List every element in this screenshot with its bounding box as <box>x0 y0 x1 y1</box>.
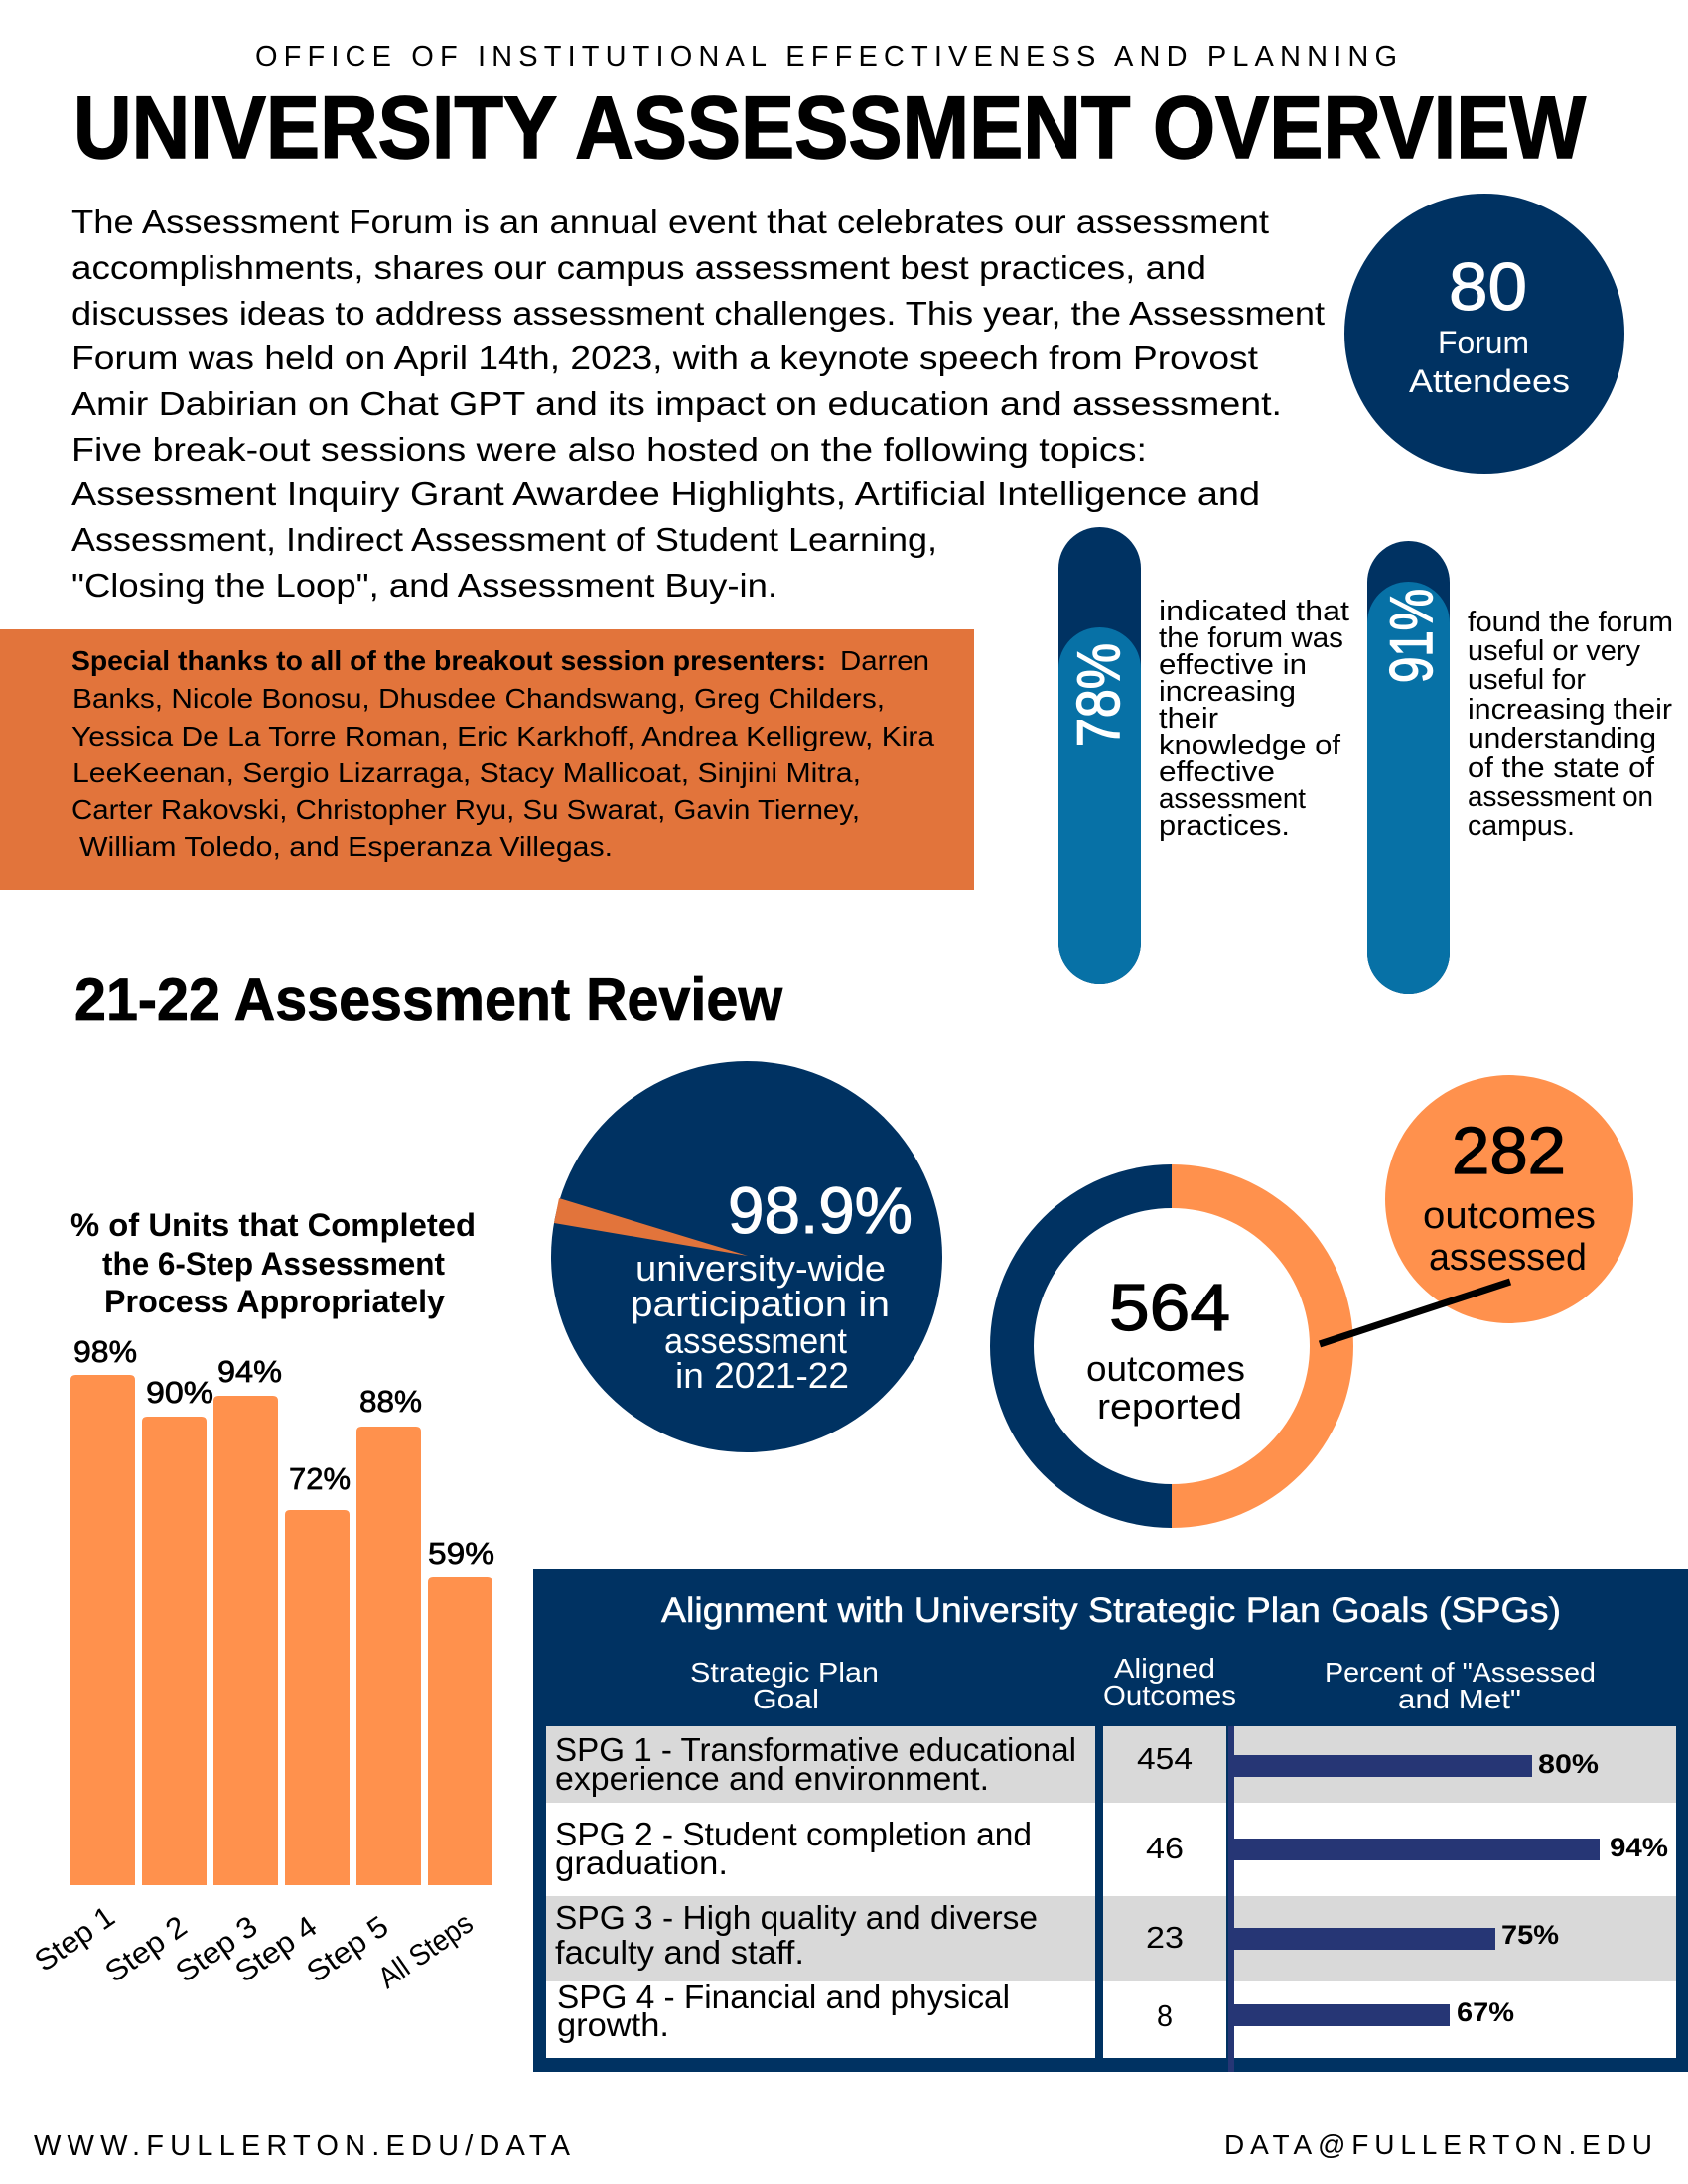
office subtitle: OFFICE OF INSTITUTIONAL EFFECTIVENESS AND PLANNING <box>255 41 1397 72</box>
thanks panel: Carter Rakovski, Christopher Ryu, Su Swarat, Gavin Tierney, <box>71 794 860 825</box>
footer email: DATA@FULLERTON.EDU <box>1224 2129 1652 2160</box>
pill 78 caption: practices. <box>1159 810 1290 842</box>
pill 91 caption: understanding <box>1468 723 1656 754</box>
thanks panel: William Toledo, and Esperanza Villegas. <box>79 831 613 862</box>
table cell backgrounds <box>546 1726 1676 2058</box>
pie: university-wide participation: assessment <box>664 1320 847 1361</box>
thanks panel: Yessica De La Torre Roman, Eric Karkhoff, Andrea Kelligrew, Kira <box>71 721 934 751</box>
column headers: Percent of "Assessed <box>1325 1657 1596 1688</box>
bar values: 72% <box>289 1461 351 1496</box>
pie: university-wide participation: 98.9% <box>728 1173 913 1247</box>
circle: outcomes assessed: assessed <box>1429 1237 1587 1279</box>
pill 78 caption: the forum was <box>1159 622 1343 654</box>
intro paragraph: accomplishments, shares our campus assessment best practices, and <box>71 249 1206 286</box>
pill 91 caption: useful for <box>1468 664 1586 696</box>
pie: university-wide participation: participation in <box>631 1284 890 1324</box>
bar values: 88% <box>359 1384 422 1419</box>
pie: university-wide participation: in 2021-22 <box>675 1355 849 1396</box>
donut: outcomes reported: 564 <box>1109 1271 1230 1345</box>
aligned outcome counts: 454 <box>1137 1741 1193 1776</box>
intro paragraph: Five break-out sessions were also hosted on the following topics: <box>71 431 1147 468</box>
aligned outcome counts: 46 <box>1146 1831 1184 1865</box>
pill 91 caption: useful or very <box>1468 635 1640 667</box>
goal labels <box>555 1731 1076 2043</box>
step labels <box>29 1900 479 1995</box>
bar values: 98% <box>73 1334 137 1369</box>
bar values: 94% <box>217 1354 282 1389</box>
chart title <box>70 1207 476 1319</box>
pill 78 caption: effective in <box>1159 649 1307 681</box>
percent labels: 75% <box>1501 1920 1559 1950</box>
goal labels: graduation. <box>555 1844 728 1881</box>
step labels: Step 5 <box>301 1910 394 1989</box>
step labels: Step 3 <box>170 1910 263 1989</box>
pill: 91 percent: 91% <box>1378 589 1445 683</box>
circle: outcomes assessed: 282 <box>1452 1114 1566 1188</box>
column headers: Outcomes <box>1103 1680 1236 1710</box>
thanks panel <box>0 629 974 890</box>
pill 78 caption: knowledge of <box>1159 730 1341 761</box>
pill 91 caption: assessment on <box>1468 781 1653 813</box>
percent labels <box>1457 1749 1668 2027</box>
column headers: Goal <box>753 1684 819 1714</box>
connector line <box>1320 1282 1510 1344</box>
pill 78 caption: their <box>1159 703 1218 735</box>
horizontal bars <box>1228 1726 1600 2072</box>
section heading: 21-22 Assessment Review <box>74 966 782 1032</box>
forum attendees circle: Forum <box>1438 325 1529 360</box>
intro paragraph: "Closing the Loop", and Assessment Buy-in. <box>71 567 777 604</box>
pill 91 caption: increasing their <box>1468 694 1672 726</box>
percent labels: 67% <box>1457 1997 1514 2027</box>
goal labels: SPG 3 - High quality and diverse <box>555 1899 1038 1936</box>
forum attendees circle: 80 <box>1449 249 1527 325</box>
thanks panel: Special thanks to all of the breakout session presenters: <box>71 645 826 676</box>
column headers: Aligned <box>1114 1653 1215 1684</box>
donut: outcomes reported: outcomes <box>1086 1348 1245 1389</box>
pie: university-wide participation <box>551 1061 942 1452</box>
goal labels: faculty and staff. <box>555 1934 804 1971</box>
step labels: Step 1 <box>29 1900 121 1979</box>
goal labels: SPG 1 - Transformative educational <box>555 1731 1076 1768</box>
column headers: and Met" <box>1398 1684 1521 1714</box>
bar values: 90% <box>146 1375 213 1410</box>
bar values <box>73 1334 494 1570</box>
pie: university-wide participation: university-wide <box>635 1248 886 1289</box>
table title: Alignment with University Strategic Plan Goals (SPGs) <box>661 1591 1561 1630</box>
donut: outcomes reported: reported <box>1097 1386 1242 1427</box>
thanks panel: LeeKeenan, Sergio Lizarraga, Stacy Mallicoat, Sinjini Mitra, <box>72 757 861 788</box>
intro paragraph: Amir Dabirian on Chat GPT and its impact on education and assessment. <box>71 385 1282 422</box>
pill 78 caption <box>1159 596 1349 842</box>
pill 78 caption: effective <box>1159 756 1275 788</box>
forum attendees circle <box>1344 194 1624 474</box>
goal labels: experience and environment. <box>555 1760 989 1797</box>
bar values: 59% <box>428 1536 494 1570</box>
intro paragraph: Assessment, Indirect Assessment of Student Learning, <box>71 521 937 558</box>
pill 91 caption: campus. <box>1468 810 1575 842</box>
goal labels: SPG 2 - Student completion and <box>555 1816 1032 1852</box>
step labels: Step 4 <box>229 1910 323 1989</box>
step labels: All Steps <box>372 1907 479 1995</box>
aligned outcome counts <box>1137 1741 1193 2033</box>
intro paragraph <box>71 204 1325 604</box>
aligned outcome counts: 8 <box>1157 1998 1173 2033</box>
chart title: the 6-Step Assessment <box>102 1246 445 1282</box>
bars <box>70 1375 492 1885</box>
donut: outcomes reported <box>990 1164 1353 1528</box>
pill 91 caption: found the forum <box>1468 607 1673 638</box>
percent labels: 80% <box>1538 1749 1599 1779</box>
thanks panel: Darren <box>840 645 929 676</box>
goal labels: SPG 4 - Financial and physical <box>557 1979 1010 2015</box>
goal labels: growth. <box>557 2006 669 2043</box>
intro paragraph: discusses ideas to address assessment challenges. This year, the Assessment <box>71 295 1325 332</box>
footer website: WWW.FULLERTON.EDU/DATA <box>34 2130 571 2162</box>
panel: strategic plan alignment table <box>533 1569 1688 2072</box>
circle: outcomes assessed: outcomes <box>1423 1195 1596 1237</box>
bar chart: 6-step completion <box>29 1207 494 1995</box>
percent labels: 94% <box>1610 1833 1668 1862</box>
forum attendees circle: Attendees <box>1409 363 1570 399</box>
pill: 91 percent <box>1367 541 1450 994</box>
aligned outcome counts: 23 <box>1146 1920 1184 1955</box>
column headers: Strategic Plan <box>690 1657 879 1688</box>
pill 78 caption: assessment <box>1159 783 1306 815</box>
pill: 78 percent: 78% <box>1065 643 1132 747</box>
title: UNIVERSITY ASSESSMENT OVERVIEW <box>73 77 1586 177</box>
pill 91 caption <box>1468 607 1673 842</box>
chart title: Process Appropriately <box>104 1284 445 1319</box>
pill 91 caption: of the state of <box>1468 752 1655 784</box>
thanks panel: Banks, Nicole Bonosu, Dhusdee Chandswang, Greg Childers, <box>72 683 885 714</box>
intro paragraph: Forum was held on April 14th, 2023, with a keynote speech from Provost <box>71 340 1258 376</box>
intro paragraph: The Assessment Forum is an annual event that celebrates our assessment <box>71 204 1269 240</box>
circle: outcomes assessed <box>1385 1075 1633 1323</box>
pill 78 caption: indicated that <box>1159 596 1349 627</box>
intro paragraph: Assessment Inquiry Grant Awardee Highlights, Artificial Intelligence and <box>71 476 1260 512</box>
chart title: % of Units that Completed <box>70 1207 476 1243</box>
pill: 78 percent <box>1058 527 1141 984</box>
pill 78 caption: increasing <box>1159 676 1296 708</box>
step labels: Step 2 <box>99 1910 193 1989</box>
column headers <box>690 1653 1596 1714</box>
